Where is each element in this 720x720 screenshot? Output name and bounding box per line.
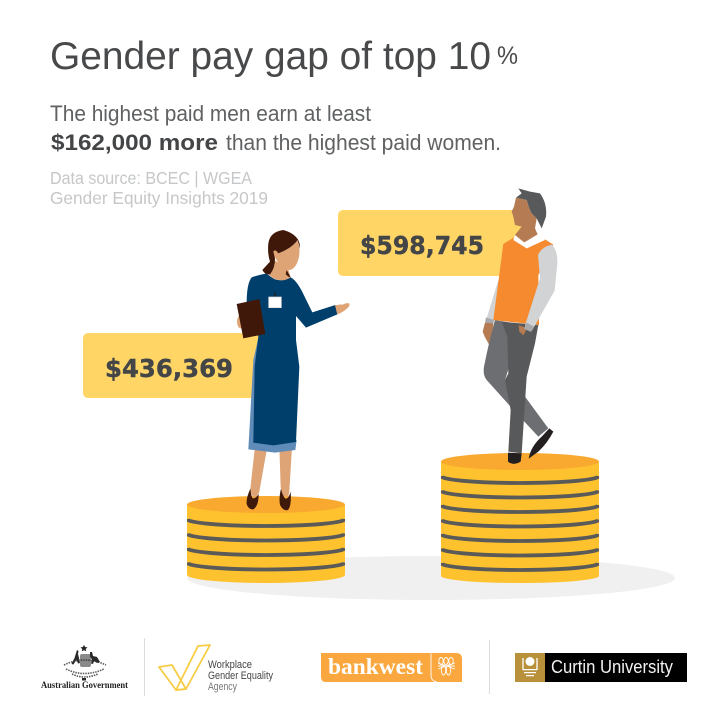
subtitle <box>50 101 501 155</box>
callout: men's pay <box>338 210 523 276</box>
logo: Bankwest: bankwest <box>328 654 423 680</box>
logo: Australian Government <box>41 645 129 690</box>
coin stack: women <box>187 496 345 583</box>
icon: coat of arms <box>64 645 106 680</box>
callout: women's pay <box>83 333 263 398</box>
subtitle: $162,000 more <box>51 130 218 155</box>
ground shadow <box>187 556 675 600</box>
subtitle: than the highest paid women. <box>226 130 501 155</box>
logo: Australian Government: Australian Government <box>41 680 129 690</box>
data source: Gender Equity Insights 2019 <box>50 188 268 208</box>
title: % <box>497 42 518 70</box>
logo: Workplace Gender Equality Agency: Gender Equality <box>208 670 273 682</box>
logo: Workplace Gender Equality Agency: Agency <box>208 681 237 693</box>
icon: Curtin shield <box>522 657 538 676</box>
logo: Workplace Gender Equality Agency <box>159 645 273 693</box>
logo: Curtin University <box>515 653 687 682</box>
icon: knot motif <box>438 658 455 675</box>
figure: woman <box>237 230 350 510</box>
logo: Bankwest <box>321 653 462 682</box>
divider <box>144 638 145 696</box>
title: Gender pay gap of top 10 <box>50 35 491 78</box>
coin stack: men <box>441 453 599 583</box>
figure: man <box>483 188 557 464</box>
callout: women's pay: $436,369 <box>105 354 233 383</box>
logo: Curtin University: Curtin University <box>551 657 673 677</box>
divider <box>489 640 490 694</box>
subtitle: The highest paid men earn at least <box>50 101 372 126</box>
data source: Data source: BCEC | WGEA <box>50 168 252 188</box>
callout: men's pay: $598,745 <box>360 231 484 260</box>
logo: Workplace Gender Equality Agency: Workplace <box>208 659 252 671</box>
icon: yellow tick <box>159 645 210 690</box>
data source <box>50 168 268 208</box>
